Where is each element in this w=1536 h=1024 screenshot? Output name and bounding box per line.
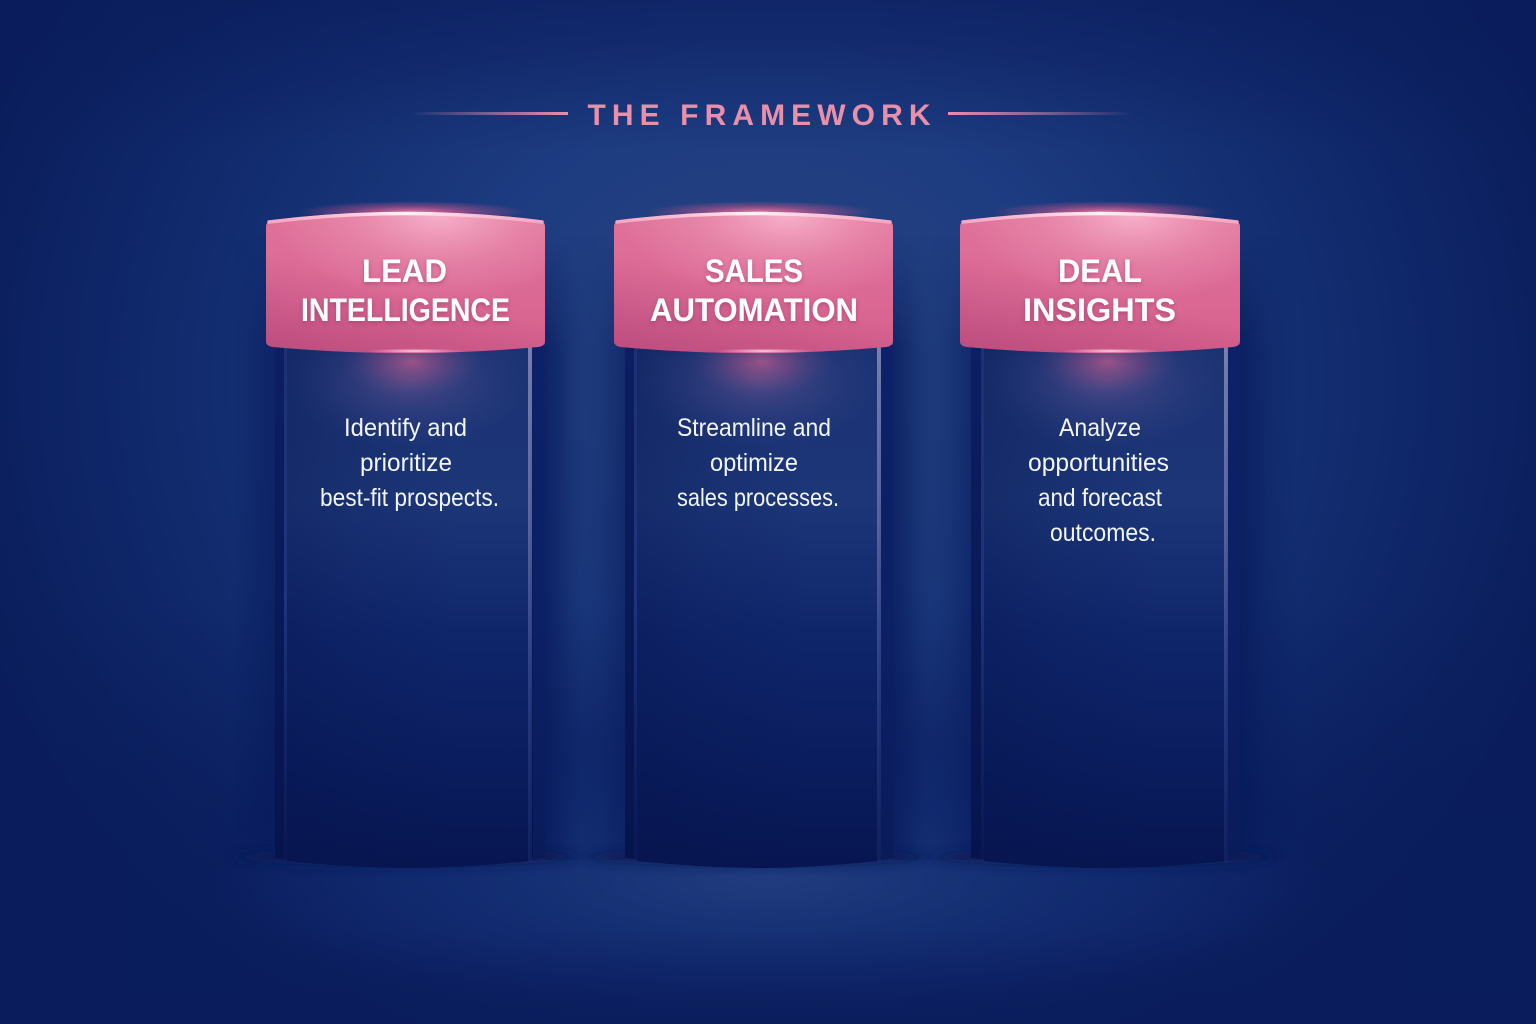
top glow bbox=[645, 201, 875, 223]
description: Identify and bbox=[344, 414, 467, 442]
heading: LEAD bbox=[362, 253, 447, 289]
description bbox=[677, 414, 839, 512]
header cap bbox=[266, 212, 545, 354]
panel: deal insights bbox=[931, 201, 1295, 868]
description: prioritize bbox=[360, 449, 452, 477]
heading: AUTOMATION bbox=[650, 292, 858, 328]
title bbox=[410, 99, 1133, 132]
under-cap glow bbox=[635, 310, 885, 450]
description: Analyze bbox=[1059, 414, 1141, 442]
description: sales processes. bbox=[677, 484, 839, 512]
description: best-fit prospects. bbox=[320, 484, 499, 512]
heading: INTELLIGENCE bbox=[301, 292, 510, 328]
heading bbox=[301, 253, 510, 328]
pillar shadow bbox=[934, 280, 1266, 868]
description: opportunities bbox=[1028, 449, 1169, 477]
panel: sales automation bbox=[583, 201, 948, 868]
pillar body bbox=[275, 345, 545, 868]
title text: THE FRAMEWORK bbox=[588, 99, 931, 132]
under-cap glow bbox=[285, 310, 535, 450]
heading bbox=[650, 253, 858, 328]
pillar body bbox=[625, 345, 893, 868]
heading: SALES bbox=[705, 253, 803, 289]
description: and forecast bbox=[1038, 484, 1162, 512]
description bbox=[1028, 414, 1169, 547]
heading: INSIGHTS bbox=[1023, 292, 1176, 328]
header cap bbox=[960, 212, 1240, 354]
panel: lead intelligence bbox=[256, 202, 579, 868]
pillar body bbox=[971, 345, 1240, 868]
pillar shadow bbox=[256, 268, 579, 868]
description: outcomes. bbox=[1050, 519, 1156, 547]
top glow bbox=[991, 201, 1221, 223]
description: Streamline and bbox=[677, 414, 831, 442]
pillar shadow bbox=[586, 267, 928, 871]
heading bbox=[1023, 253, 1176, 328]
description: optimize bbox=[710, 449, 798, 477]
title rule right bbox=[948, 112, 1133, 115]
title rule left bbox=[410, 112, 568, 115]
heading: DEAL bbox=[1058, 253, 1142, 289]
under-cap glow bbox=[981, 310, 1231, 450]
header cap bbox=[614, 212, 893, 354]
top glow bbox=[297, 201, 527, 223]
description bbox=[320, 414, 499, 512]
